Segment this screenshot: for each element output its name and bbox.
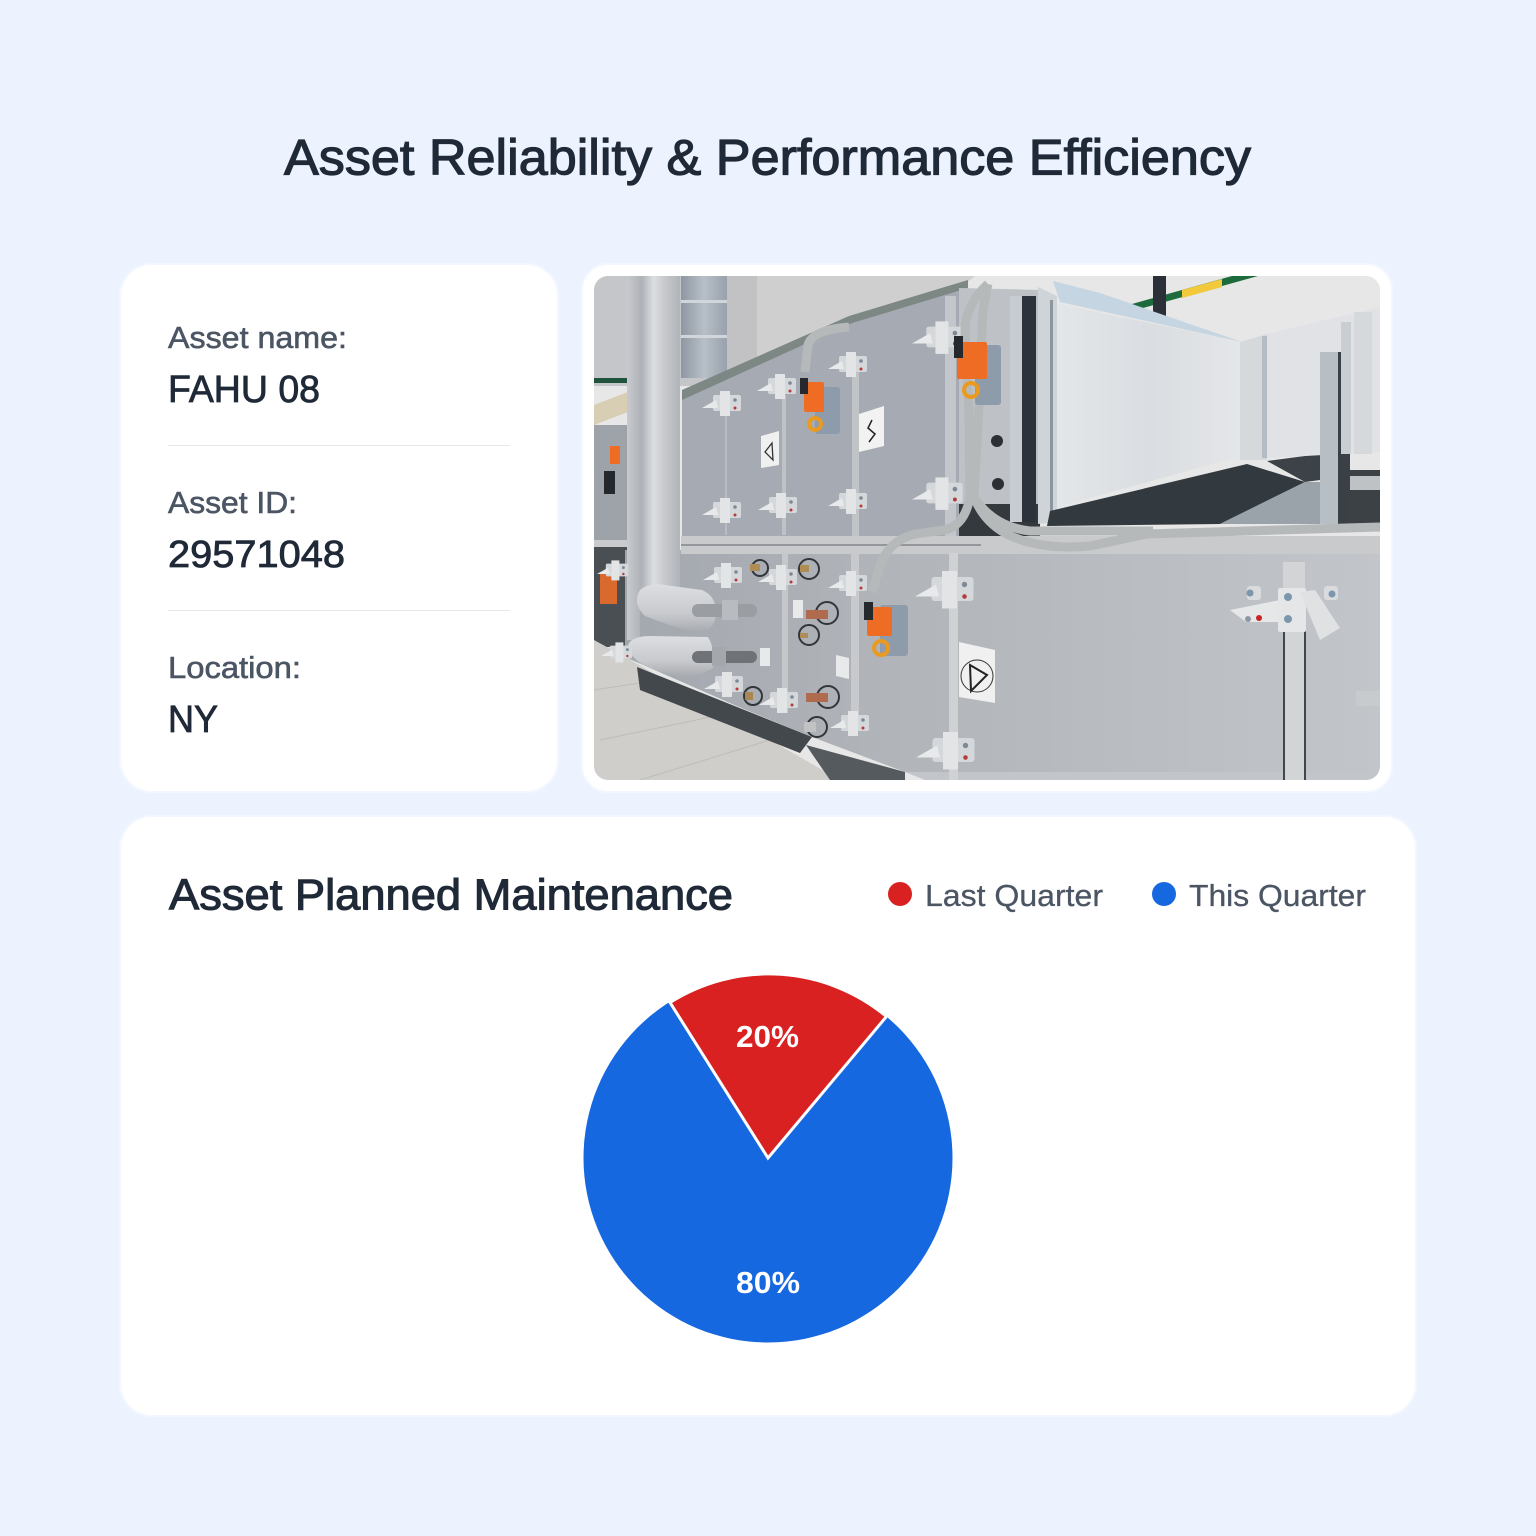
actuators bbox=[800, 336, 1001, 656]
pie chart bbox=[584, 974, 952, 1342]
infographic canvas bbox=[121, 137, 1415, 1415]
asset id value: 29571048 bbox=[168, 534, 345, 576]
right door strip bbox=[1283, 562, 1305, 780]
legend: last quarter: Last Quarter bbox=[925, 878, 1103, 913]
pipe bbox=[627, 276, 680, 640]
wall stripe bbox=[1132, 276, 1258, 311]
value: 80%: 80% bbox=[736, 1265, 800, 1300]
chart heading: Asset Planned Maintenance bbox=[169, 870, 733, 920]
far left unit bbox=[594, 378, 628, 383]
asset id label: Asset ID: bbox=[168, 485, 297, 520]
lower unit body bbox=[625, 550, 1380, 780]
spiral duct bbox=[681, 276, 727, 378]
valves bbox=[692, 604, 757, 617]
photo: air handling unit bbox=[594, 276, 1380, 780]
labels bbox=[761, 431, 779, 468]
cables bbox=[800, 280, 1380, 554]
walls bbox=[594, 276, 1380, 780]
main duct bbox=[1109, 315, 1186, 492]
location value: NY bbox=[168, 699, 218, 741]
asset name label: Asset name: bbox=[168, 320, 347, 355]
floor bbox=[594, 640, 840, 780]
duct flanges bbox=[1010, 296, 1022, 522]
slice: last quarter 20% bbox=[670, 974, 886, 1158]
panel: asset planned maintenance bbox=[120, 816, 1416, 1416]
value: 20%: 20% bbox=[736, 1019, 799, 1054]
upper unit body bbox=[682, 288, 959, 536]
latches bbox=[702, 391, 741, 416]
legend: this quarter: This Quarter bbox=[1189, 878, 1366, 913]
side panel and bolts bbox=[959, 288, 1038, 504]
panel: asset details bbox=[120, 264, 558, 792]
asset name value: FAHU 08 bbox=[168, 369, 320, 411]
location label: Location: bbox=[168, 650, 301, 685]
title: Asset Reliability & Performance Efficiency bbox=[284, 130, 1251, 186]
panel: photo card bbox=[582, 264, 1392, 792]
